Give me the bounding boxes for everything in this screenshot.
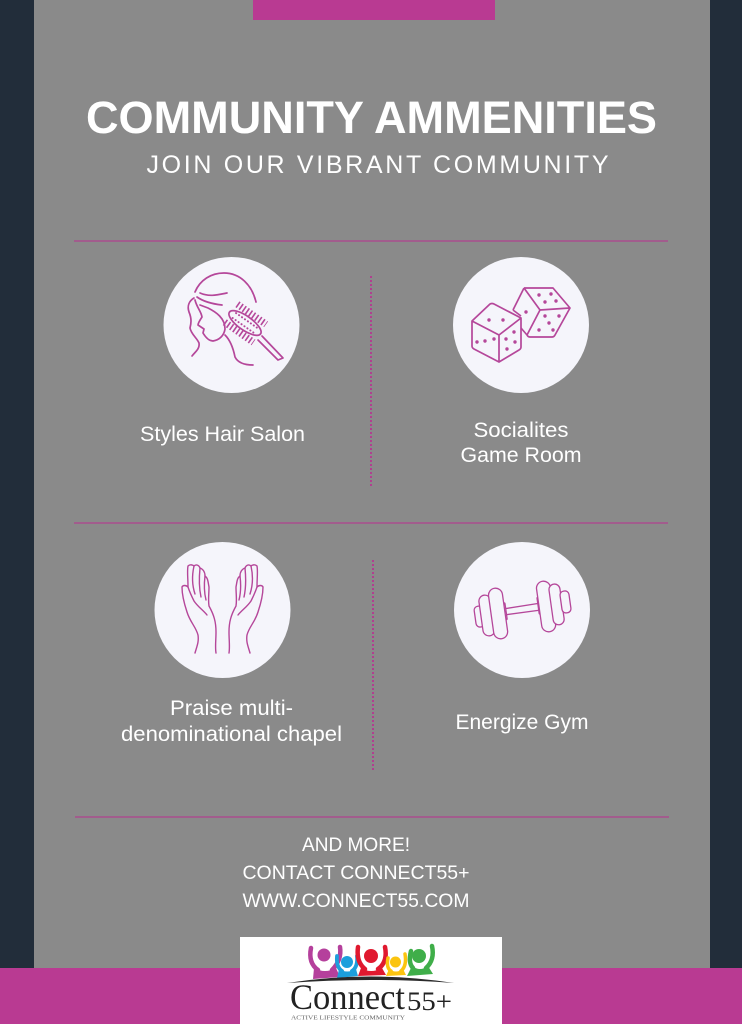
label: chapel: Praise multi-: [170, 697, 293, 720]
panel: gym: [454, 542, 590, 734]
logo: swoosh: [287, 976, 454, 983]
panel: hair salon: [140, 257, 305, 446]
contact text block: WWW.CONNECT55.COM: [242, 890, 470, 912]
panel: chapel: [121, 542, 342, 746]
right navy side band: [710, 0, 742, 1024]
panel: chapel: denominational chapel: [121, 723, 342, 746]
label: salon: Styles Hair Salon: [140, 423, 305, 446]
bottom magenta band: [0, 968, 742, 1024]
subtitle: JOIN OUR VIBRANT COMMUNITY: [146, 151, 609, 179]
panel: game room: Game Room: [460, 444, 582, 467]
logo: five raised-arm figures: [310, 946, 433, 979]
logo: 55+: 55+: [407, 987, 452, 1016]
contact text block: AND MORE!: [302, 834, 410, 856]
top magenta accent bar: [253, 0, 495, 20]
label: game room: Socialites: [474, 419, 568, 442]
left navy side band: [0, 0, 34, 1024]
icon: dumbbell: [454, 542, 590, 678]
title: COMMUNITY AMMENITIES: [86, 92, 657, 143]
label: gym: Energize Gym: [456, 711, 588, 734]
contact text block: [242, 834, 470, 912]
logo panel: [240, 937, 502, 1024]
logo: wordmark: Connect: [290, 977, 405, 1017]
logo: tagline: ACTIVE LIFESTYLE COMMUNITY: [291, 1014, 405, 1022]
contact text block: CONTACT CONNECT55+: [242, 862, 470, 884]
icon: hair and brush: [164, 257, 300, 393]
panel: game room: [453, 257, 589, 467]
icon: dice: [453, 257, 589, 393]
icon: praying hands: [154, 542, 290, 678]
